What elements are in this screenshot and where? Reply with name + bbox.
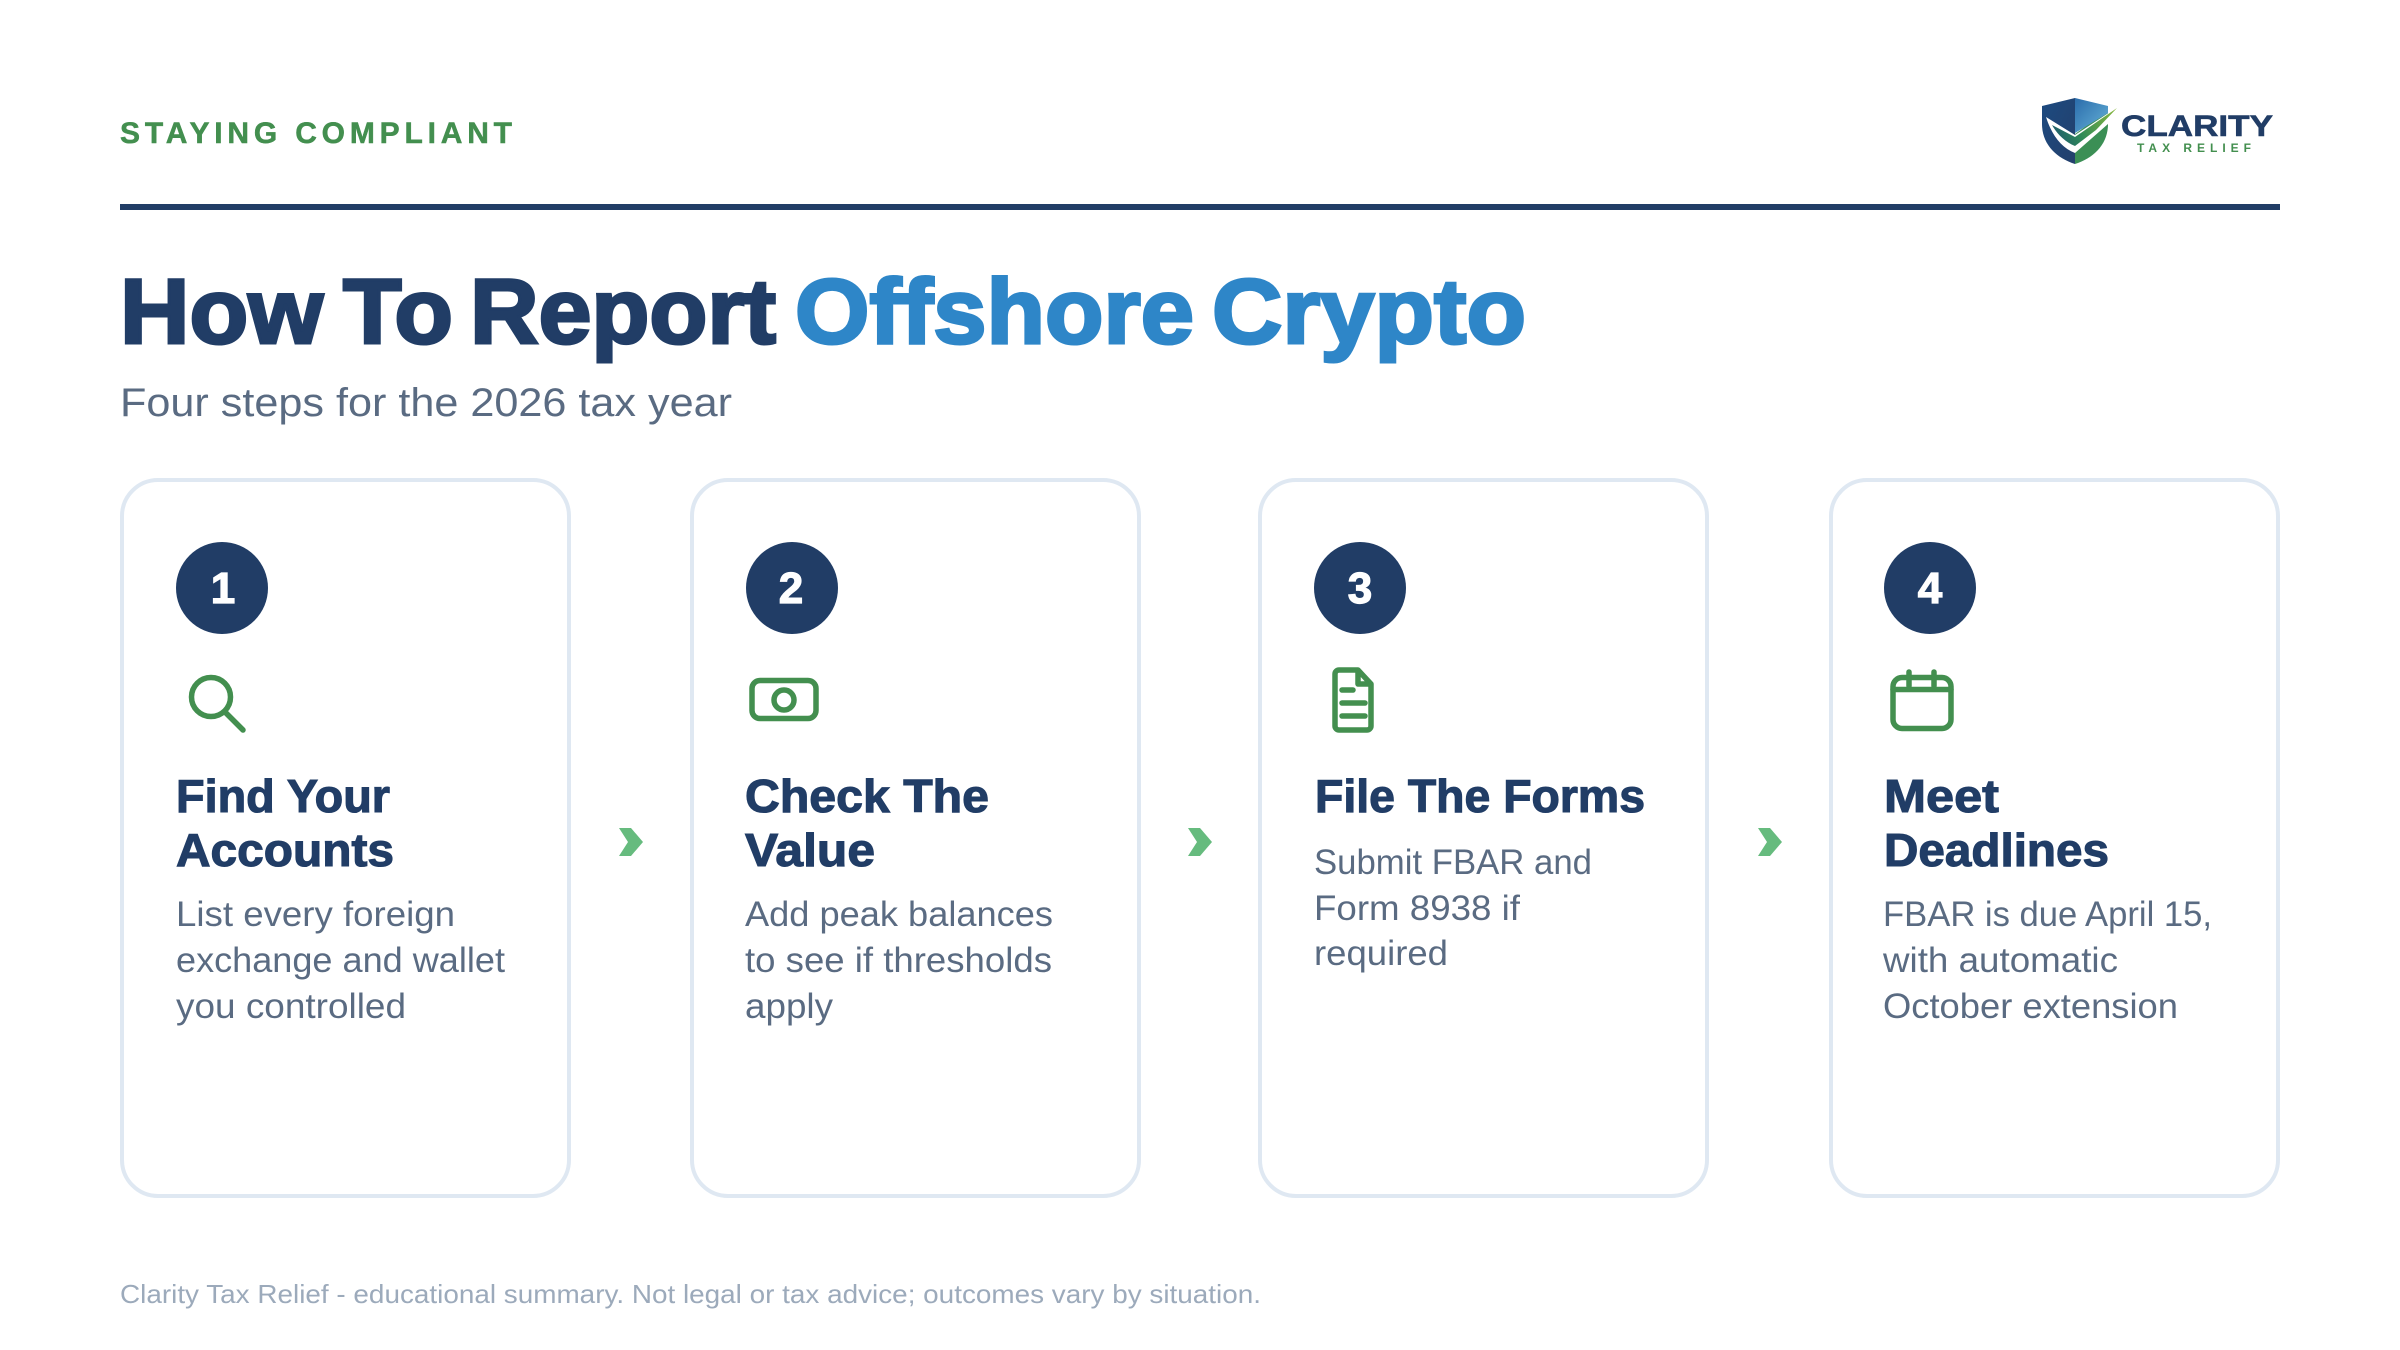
title: Report <box>470 261 776 363</box>
panel: step 1 <box>122 480 569 1196</box>
text: step 2 description: apply <box>745 987 834 1026</box>
number badge 3: 3 <box>1348 564 1372 613</box>
text: step 2 description: to see if thresholds <box>745 941 1052 980</box>
icon: banknote <box>752 680 816 718</box>
text: step 1 description: exchange and wallet <box>176 941 505 980</box>
heading: check the value <box>745 770 989 876</box>
text: step 1 description <box>176 895 505 1026</box>
heading: check the value: Value <box>745 824 875 876</box>
text: step 1 description: List every foreign <box>176 895 455 934</box>
heading: meet deadlines: Deadlines <box>1884 824 2109 876</box>
number badge 2: 2 <box>779 564 803 613</box>
number badge 4: 4 <box>1918 564 1943 613</box>
title: Offshore <box>795 261 1194 363</box>
heading: check the value: Check The <box>745 770 989 822</box>
text: step 4 description: October extension <box>1883 987 2178 1026</box>
number badge 3 <box>1314 542 1406 634</box>
logo <box>2042 98 2273 164</box>
subtitle: Four steps for the 2026 tax year <box>120 381 732 425</box>
arrow 2 <box>1188 828 1212 856</box>
text: step 3 description <box>1314 843 1592 973</box>
text: step 2 description <box>745 895 1053 1026</box>
icon: document <box>1335 670 1371 730</box>
icon: shield <box>2042 98 2117 164</box>
number badge 1: 1 <box>211 564 235 613</box>
heading: find your accounts: Accounts <box>176 824 394 876</box>
heading: meet deadlines <box>1884 770 2109 876</box>
arrow 1 <box>619 828 643 856</box>
text: step 4 description: FBAR is due April 15, <box>1883 895 2212 934</box>
title: To <box>343 261 453 363</box>
title: How <box>120 261 323 363</box>
heading: file the forms: File The Forms <box>1315 770 1645 822</box>
panel: step 3 <box>1260 480 1707 1196</box>
text: step 3 description: Submit FBAR and <box>1314 843 1592 882</box>
icon: calendar <box>1893 672 1951 728</box>
text: step 4 description: with automatic <box>1882 941 2118 980</box>
panel: step 2 <box>692 480 1139 1196</box>
heading: find your accounts: Find Your <box>176 770 390 822</box>
number badge 4 <box>1884 542 1976 634</box>
title: Crypto <box>1212 261 1526 363</box>
panel: step 4 <box>1831 480 2278 1196</box>
text: step 3 description: Form 8938 if <box>1314 889 1520 928</box>
footer disclaimer: Clarity Tax Relief - educational summary. Not legal or tax advice; outcomes vary by situation. <box>120 1279 1261 1309</box>
eyebrow label: STAYING COMPLIANT <box>120 117 512 150</box>
text: step 4 description <box>1882 895 2212 1026</box>
title <box>120 261 1526 363</box>
number badge 2 <box>746 542 838 634</box>
logo tagline: TAX RELIEF <box>2137 141 2251 155</box>
text: step 2 description: Add peak balances <box>745 895 1053 934</box>
text: step 3 description: required <box>1314 934 1448 973</box>
number badge 1 <box>176 542 268 634</box>
icon: magnifying glass <box>192 678 243 730</box>
heading: meet deadlines: Meet <box>1884 770 1999 822</box>
arrow 3 <box>1758 828 1782 856</box>
logo wordmark: CLARITY <box>2121 110 2273 143</box>
heading: find your accounts <box>176 770 394 876</box>
text: step 1 description: you controlled <box>176 987 406 1026</box>
